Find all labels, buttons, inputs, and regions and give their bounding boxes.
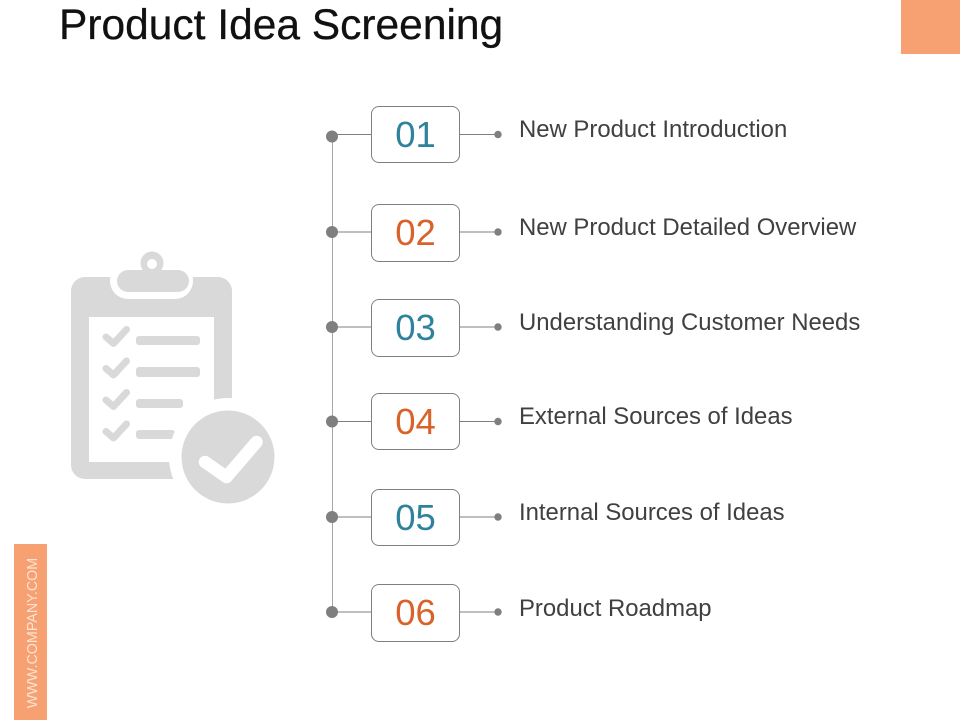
website tag: WWW.COMPANY.COM	[25, 557, 41, 708]
step 06 label: Product Roadmap	[519, 595, 712, 622]
step 04 number	[371, 393, 460, 450]
timeline connectors	[326, 130, 502, 618]
website tag	[14, 544, 47, 720]
step 05 number	[371, 489, 460, 546]
step 01 label: New Product Introduction	[519, 116, 787, 143]
step 05 label: Internal Sources of Ideas	[519, 499, 785, 526]
step 05 number: 05	[395, 497, 436, 538]
icon: clipboard with checkmark	[71, 252, 274, 504]
step 03 number: 03	[395, 307, 436, 348]
step 04 number: 04	[395, 401, 436, 442]
step 02 label: New Product Detailed Overview	[519, 214, 856, 241]
step 03 label: Understanding Customer Needs	[519, 309, 860, 336]
title: Product Idea Screening	[59, 2, 503, 49]
step 06 number	[371, 584, 460, 642]
step 01 number	[371, 106, 460, 163]
step 02 number	[371, 204, 460, 262]
step 04 label: External Sources of Ideas	[519, 403, 793, 430]
corner accent block	[901, 0, 960, 54]
step 02 number: 02	[395, 212, 436, 253]
step 06 number: 06	[395, 592, 436, 633]
step 03 number	[371, 299, 460, 357]
step 01 number: 01	[395, 114, 436, 155]
